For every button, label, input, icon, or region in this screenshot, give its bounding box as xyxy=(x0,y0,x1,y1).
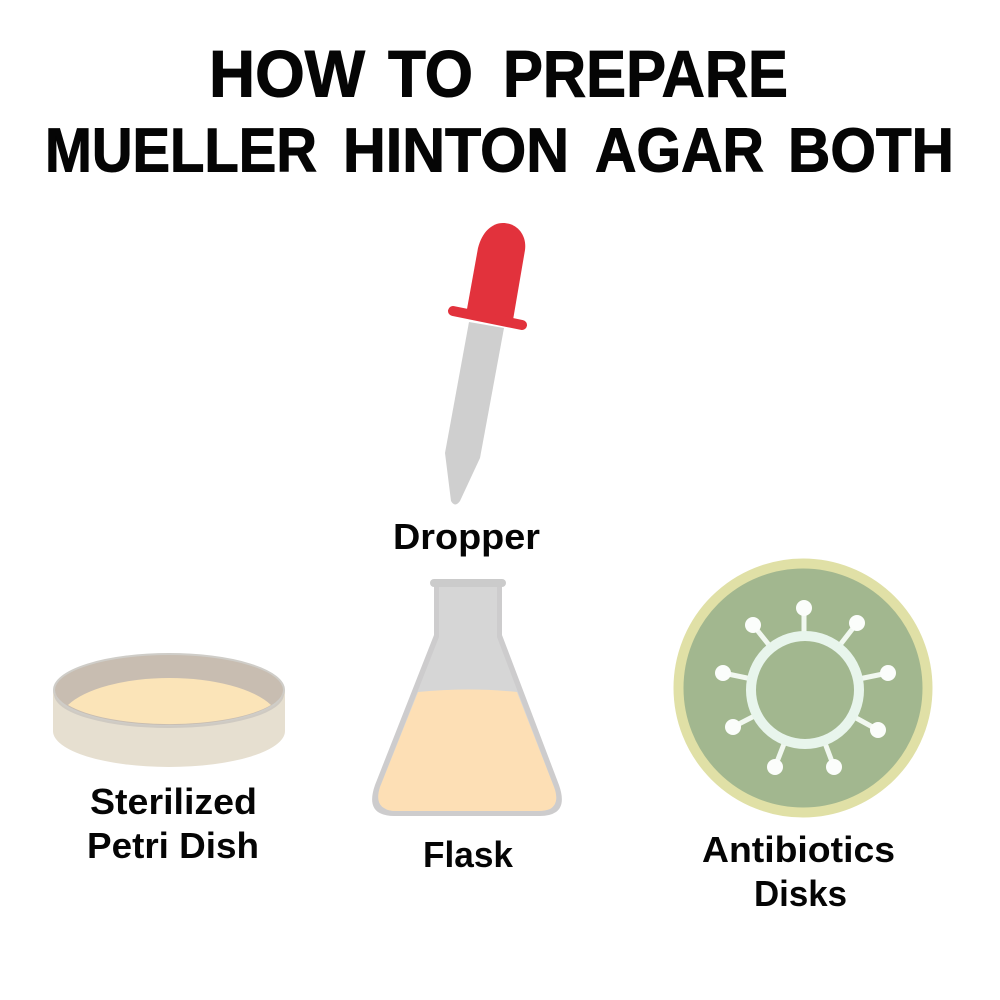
icon: flask xyxy=(372,579,562,816)
title: MUELLER xyxy=(45,116,317,186)
icon: antibiotics disk xyxy=(678,564,928,812)
title xyxy=(45,36,954,186)
label: sterilized petri dish: Petri Dish xyxy=(87,825,259,866)
label: flask: Flask xyxy=(423,834,514,875)
icon: dropper xyxy=(445,223,525,504)
title: HOW xyxy=(209,36,366,110)
title: PREPARE xyxy=(503,36,788,110)
title: HINTON xyxy=(343,116,569,186)
title: BOTH xyxy=(788,116,954,186)
title: AGAR xyxy=(595,116,764,186)
title: TO xyxy=(388,36,473,110)
label: antibiotics disks xyxy=(702,829,895,914)
icon: sterilized petri dish xyxy=(53,654,285,767)
label: antibiotics disks: Antibiotics xyxy=(702,829,895,870)
label: dropper: Dropper xyxy=(393,516,540,557)
label: antibiotics disks: Disks xyxy=(754,873,847,914)
label: sterilized petri dish: Sterilized xyxy=(90,781,257,822)
label: sterilized petri dish xyxy=(87,781,259,866)
